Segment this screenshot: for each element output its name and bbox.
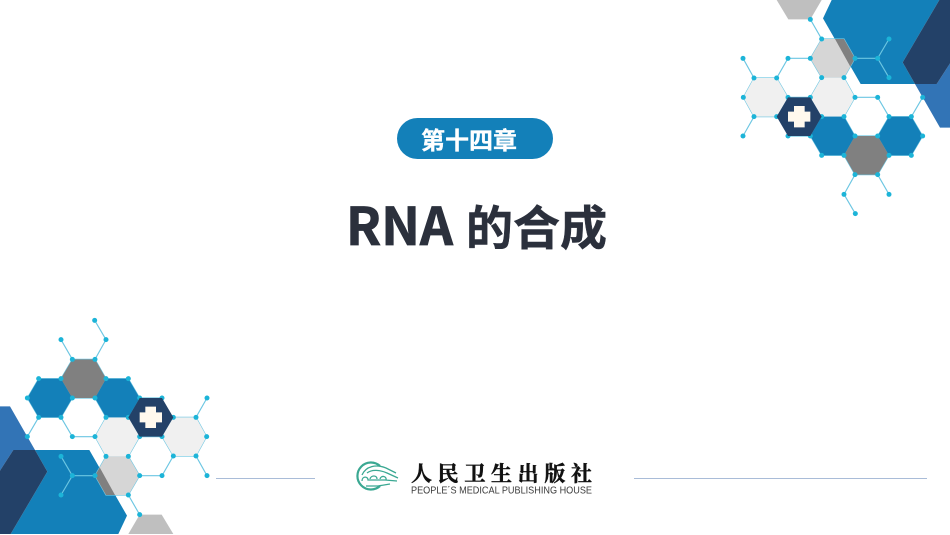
- shape: navy hexagon: [0, 450, 47, 534]
- publisher logo: [357, 458, 592, 496]
- footer line left: [216, 478, 315, 479]
- shape: large blue hexagon: [823, 0, 939, 84]
- shape: grey trapezoid: [777, 0, 822, 19]
- footer line right: [634, 478, 927, 479]
- network lines: [27, 320, 207, 515]
- shape: large blue hexagon: [11, 450, 127, 534]
- icon: medical cross on navy hexagon: [777, 97, 822, 136]
- network lines: [743, 19, 923, 214]
- filled hexagons: [27, 359, 207, 495]
- shape: mid-blue hexagon: [0, 406, 35, 471]
- title: [346, 185, 607, 260]
- shape: grey trapezoid: [128, 515, 173, 534]
- publisher name english: PEOPLE´S MEDICAL PUBLISHING HOUSE: [411, 484, 592, 496]
- chapter badge: [397, 118, 553, 159]
- chapter badge: 第十四章: [421, 121, 517, 156]
- title: 的合成: [466, 190, 607, 259]
- title: RNA: [346, 185, 454, 260]
- decoration: top-right hexagon cluster: [740, 0, 950, 216]
- shape: navy hexagon: [903, 0, 950, 84]
- network nodes: [25, 318, 210, 517]
- network nodes: [740, 17, 925, 216]
- publisher name chinese: 人民卫生出版社: [411, 458, 592, 488]
- icon: medical cross on navy hexagon: [128, 398, 173, 437]
- shape: mid-blue hexagon: [915, 63, 950, 128]
- filled hexagons: [743, 39, 923, 175]
- icon: publisher emblem: [357, 463, 398, 490]
- decoration: bottom-left hexagon cluster: [0, 318, 210, 534]
